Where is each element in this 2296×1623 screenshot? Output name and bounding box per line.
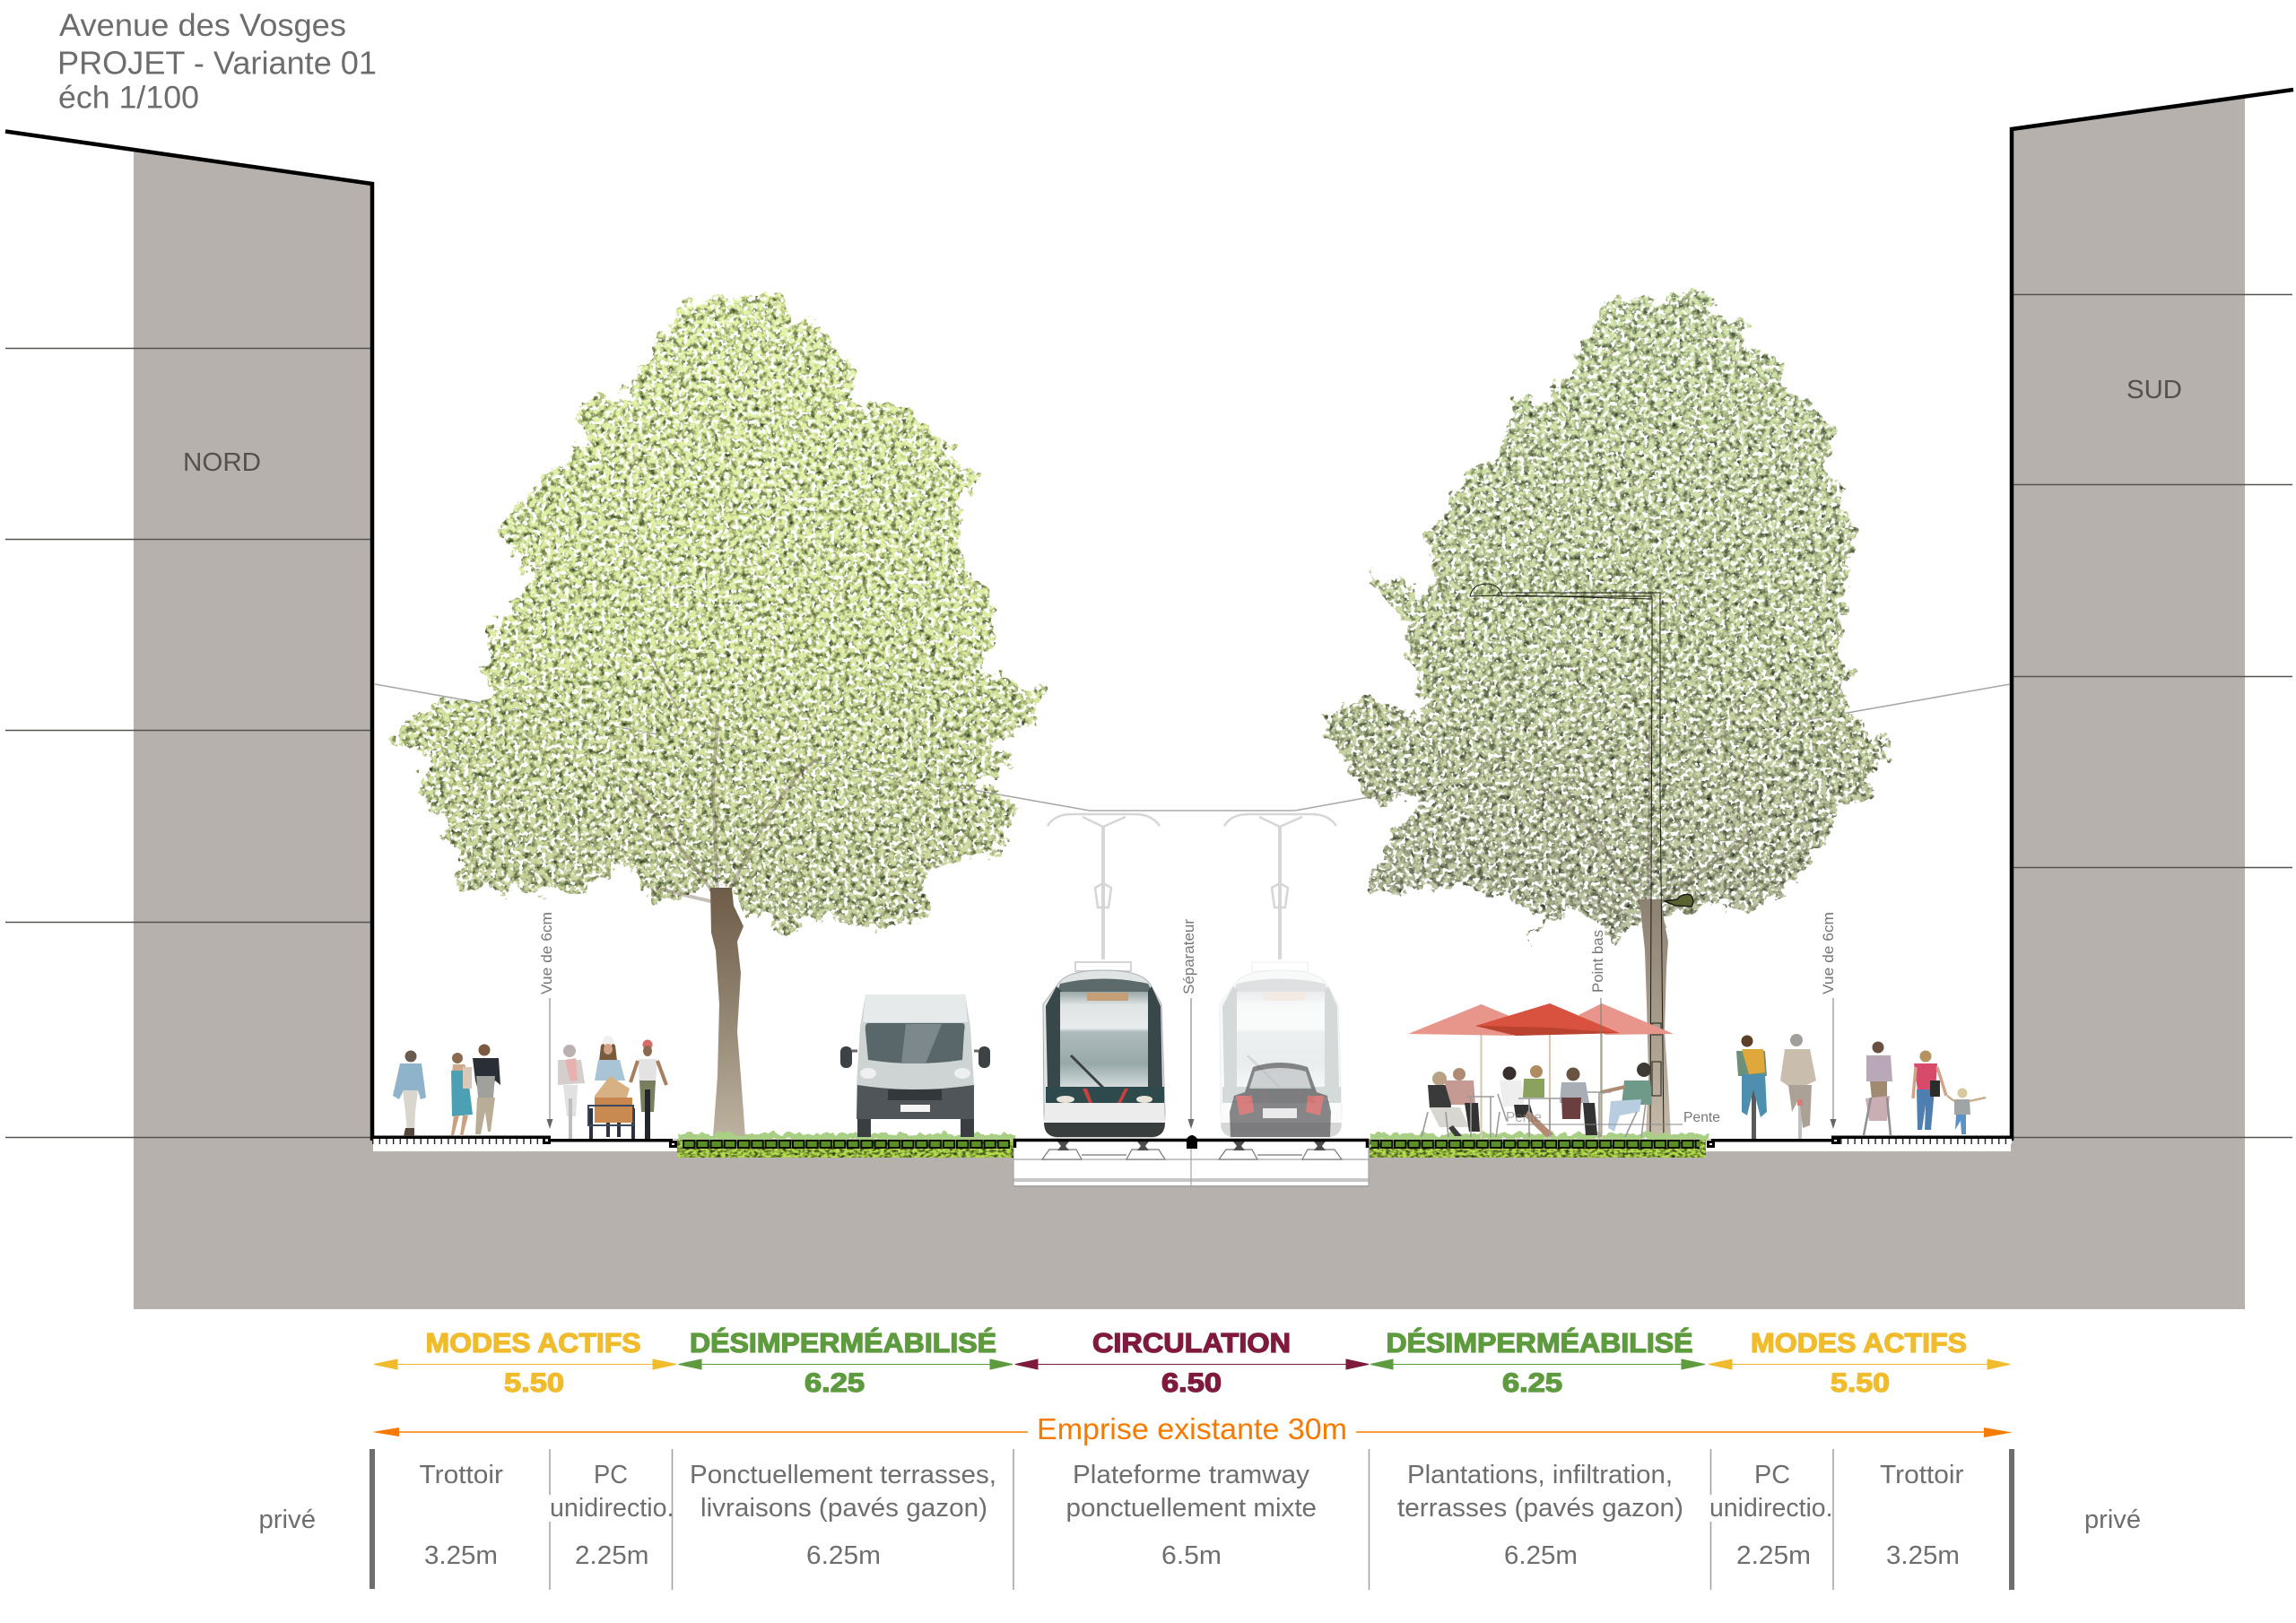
white sub-base right — [1706, 1140, 2011, 1151]
section table — [258, 1449, 2141, 1590]
rails — [1057, 1141, 1326, 1150]
column terrasses: livraisons (pavés gazon) — [700, 1494, 987, 1523]
column pc: unidirectio. — [550, 1494, 674, 1523]
north floor lines — [5, 348, 371, 1137]
child — [1947, 1089, 1986, 1134]
annotation: Point bas: Point bas — [1589, 930, 1606, 993]
woman — [1913, 1051, 1946, 1130]
van mirrors — [852, 1049, 978, 1053]
annotation: Pente: Pente — [1683, 1110, 1720, 1125]
table thick edges — [370, 1449, 375, 1589]
tree branches north — [632, 646, 821, 901]
north facade outline — [5, 131, 372, 1141]
arrow — [1709, 1359, 2010, 1369]
cyclists south — [1736, 1034, 1816, 1139]
car — [1230, 1063, 1331, 1137]
tree crown north — [391, 292, 1045, 933]
south facade outline — [2012, 90, 2293, 1141]
column terrasses: 6.25m — [806, 1541, 881, 1570]
south floor lines — [2013, 294, 2292, 1137]
south sidewalk and cycle lane — [1707, 1135, 2013, 1148]
pedestrian 2 — [451, 1053, 473, 1136]
seated woman — [1428, 1072, 1469, 1136]
column pc right: unidirectio. — [1709, 1494, 1833, 1523]
green strip north — [677, 1133, 1013, 1158]
pedestrian 3 — [473, 1044, 500, 1134]
pedestrian 1 — [393, 1051, 426, 1136]
grass tufts — [677, 1133, 1013, 1141]
platform tramway section — [1013, 1140, 1369, 1186]
legend: désimperméabilisé right: DÉSIMPERMÉABILISÉ — [1387, 1327, 1693, 1358]
column pc: PC — [594, 1461, 628, 1489]
column pc — [550, 1461, 674, 1570]
pedestrians south — [1864, 1042, 1986, 1135]
column plantations: 6.25m — [1504, 1541, 1578, 1570]
platform surface line — [1013, 1139, 1369, 1148]
legend: désimperméabilisé left — [678, 1327, 1013, 1398]
tree trunk north — [710, 888, 745, 1137]
cycle lane line — [551, 1139, 673, 1142]
cyclist — [631, 1040, 666, 1139]
emprise label: Emprise existante 30m — [1037, 1412, 1347, 1445]
arrow — [1015, 1359, 1369, 1369]
street lamp — [1470, 584, 1693, 1137]
building and ground section: south block — [1013, 97, 2245, 1309]
column pc: 2.25m — [575, 1541, 649, 1570]
tree: south — [1326, 287, 1893, 1137]
rail blocks — [1042, 1150, 1342, 1159]
ghost cyclist — [558, 1045, 585, 1139]
sidewalk top line — [370, 1135, 551, 1139]
legend: désimperméabilisé right: 6.25 — [1502, 1368, 1562, 1398]
sidewalk hatch — [372, 1139, 543, 1144]
annotation: Vue de 6cm north — [538, 912, 555, 1129]
van wheels — [857, 1116, 871, 1137]
curb box 2 — [669, 1141, 677, 1148]
text masks on dividers — [548, 1495, 552, 1522]
column terrasses: Ponctuellement terrasses, — [690, 1461, 996, 1489]
emprise arrow right — [1356, 1431, 1984, 1433]
grass pavers — [683, 1140, 1010, 1149]
grass pavers — [1371, 1140, 1700, 1149]
catenary wires — [375, 684, 2010, 811]
column plantations: Plantations, infiltration, — [1407, 1461, 1673, 1489]
column trottoir: 3.25m — [424, 1541, 498, 1570]
tram left — [1043, 962, 1165, 1137]
curb box — [543, 1136, 551, 1144]
table dividers — [550, 1449, 1833, 1590]
cyclists north — [558, 1036, 666, 1139]
arrow — [678, 1359, 1013, 1369]
tram and car right (ghosted) — [1220, 962, 1342, 1137]
tree: north — [391, 292, 1045, 1137]
umbrella right — [1578, 1003, 1674, 1035]
curb box — [1831, 1136, 1840, 1144]
curb box 2 — [1707, 1141, 1715, 1148]
annotation: Pente: Pente — [1506, 1110, 1542, 1125]
ground section under roadway — [134, 1139, 2245, 1309]
grass tufts — [1370, 1133, 1706, 1141]
white sub-base left — [373, 1140, 678, 1151]
seated person grey top — [1560, 1067, 1597, 1135]
sidewalk hatch — [1840, 1139, 2012, 1144]
cargo bike wheels — [591, 1108, 633, 1139]
annotation: Vue de 6cm north: Vue de 6cm — [538, 912, 555, 994]
annotation: Séparateur — [1180, 919, 1197, 1129]
tree branches south — [1543, 717, 1749, 919]
cyclist with backpack — [1736, 1035, 1767, 1139]
cafe terrace — [1408, 1003, 1674, 1139]
arrow — [1370, 1359, 1705, 1369]
umbrella centre — [1475, 1003, 1620, 1036]
column pc right: PC — [1754, 1461, 1790, 1489]
legend: modes actifs left: MODES ACTIFS — [425, 1327, 640, 1358]
north sidewalk and cycle lane — [370, 1135, 677, 1148]
emprise dimension — [372, 1412, 2013, 1445]
label: NORD: NORD — [183, 448, 261, 477]
van — [840, 994, 990, 1137]
platform layers — [1013, 1140, 1369, 1186]
legend: circulation: CIRCULATION — [1092, 1327, 1291, 1358]
van windshield — [865, 1023, 965, 1063]
column terrasses — [690, 1461, 996, 1570]
tree trunk south — [1639, 899, 1671, 1137]
umbrella poles — [1482, 1031, 1602, 1139]
legend: circulation — [1015, 1327, 1369, 1398]
column trottoir right — [1880, 1461, 1964, 1570]
label: SUD: SUD — [2126, 376, 2182, 404]
column plantations: terrasses (pavés gazon) — [1397, 1494, 1683, 1523]
title line 2: PROJET - Variante 01 — [57, 45, 377, 81]
lamp head low — [1665, 895, 1693, 907]
annotation: Vue de 6cm south: Vue de 6cm — [1820, 912, 1837, 994]
ghost cyclist — [1780, 1034, 1816, 1139]
cargo rider — [595, 1036, 625, 1081]
title line 3: éch 1/100 — [58, 81, 199, 115]
privé right: privé — [2084, 1506, 2141, 1534]
tree crown south — [1326, 287, 1893, 944]
arrow — [374, 1359, 676, 1369]
man with stroller — [1864, 1042, 1892, 1135]
column trottoir: Trottoir — [420, 1461, 503, 1489]
lamp head high — [1470, 584, 1502, 596]
sidewalk top line — [1831, 1135, 2013, 1139]
green strip south — [1370, 1133, 1706, 1158]
umbrella left — [1408, 1004, 1525, 1036]
legend: modes actifs left: 5.50 — [504, 1368, 564, 1398]
privé left: privé — [258, 1506, 316, 1534]
pedestrians north — [393, 1044, 500, 1136]
building and ground section: north block — [134, 150, 677, 1309]
legend: modes actifs right: MODES ACTIFS — [1751, 1327, 1967, 1358]
title line 1: Avenue des Vosges — [59, 8, 346, 43]
column pc right — [1709, 1461, 1833, 1570]
column pc right: 2.25m — [1736, 1541, 1811, 1570]
title block — [57, 8, 377, 115]
seated person white top — [1500, 1067, 1553, 1137]
column tramway: Plateforme tramway — [1073, 1461, 1310, 1489]
column trottoir right: 3.25m — [1886, 1541, 1960, 1570]
ghost tram — [1220, 962, 1342, 1137]
legend: désimperméabilisé left: 6.25 — [804, 1368, 865, 1398]
platform slab — [1013, 1140, 1369, 1186]
legend: modes actifs right — [1709, 1327, 2010, 1398]
cycle lane line — [1711, 1139, 1833, 1142]
annotation: Séparateur: Séparateur — [1180, 919, 1197, 994]
legend: circulation: 6.50 — [1161, 1368, 1222, 1398]
van bumper — [857, 1085, 974, 1119]
legend: désimperméabilisé left: DÉSIMPERMÉABILISÉ — [690, 1327, 996, 1358]
seated man — [1444, 1068, 1480, 1132]
pantograph left — [1048, 814, 1160, 959]
column trottoir — [420, 1461, 503, 1570]
legend: désimperméabilisé right — [1370, 1327, 1705, 1398]
grass body — [677, 1140, 1013, 1158]
van body — [857, 994, 974, 1119]
annotation: Pente — [1506, 1110, 1720, 1125]
column tramway — [1065, 1461, 1317, 1570]
separator kerb — [1187, 1135, 1197, 1149]
seated person green top — [1523, 1065, 1544, 1098]
column tramway: ponctuellement mixte — [1065, 1494, 1317, 1523]
cafe tables and chairs — [1422, 1092, 1646, 1137]
cargo boxes — [588, 1076, 634, 1125]
emprise arrow left — [372, 1428, 399, 1436]
pantograph right — [1224, 814, 1336, 959]
legend: modes actifs right: 5.50 — [1831, 1368, 1890, 1398]
legend: modes actifs left — [374, 1327, 676, 1398]
grass body — [1370, 1140, 1706, 1158]
seated person teal shirt — [1602, 1063, 1652, 1132]
column plantations — [1397, 1461, 1683, 1570]
column tramway: 6.5m — [1161, 1541, 1222, 1570]
column trottoir right: Trottoir — [1880, 1461, 1964, 1489]
annotation: Vue de 6cm south — [1820, 912, 1837, 1129]
